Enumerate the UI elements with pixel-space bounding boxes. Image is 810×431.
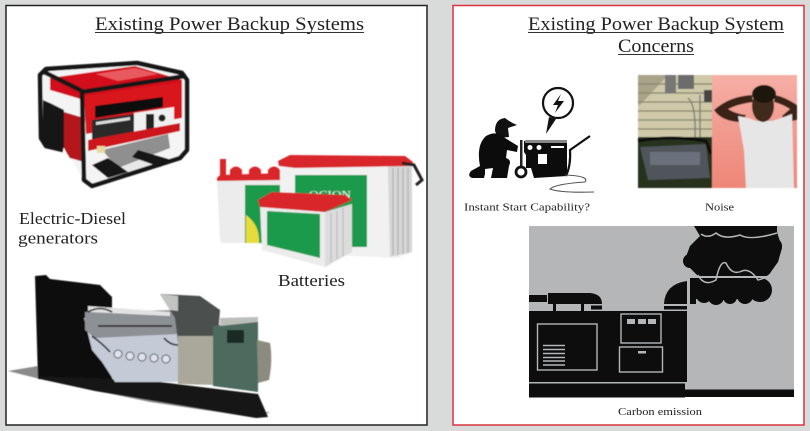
generator body: [529, 311, 794, 398]
label: electric-diesel generators: generators: [18, 228, 98, 248]
exhaust stack: [664, 278, 696, 310]
panel: existing power backup system concerns: [453, 6, 804, 425]
caption: carbon emission: Carbon emission: [618, 407, 703, 418]
battery: left: [217, 159, 285, 243]
muffler pipe: [529, 293, 602, 311]
icon: batteries: [217, 155, 422, 267]
battery: large rear: [278, 155, 422, 258]
smoke clouds: [683, 226, 782, 305]
label: electric-diesel generators: [18, 209, 126, 248]
icon: portable red generator: [40, 63, 187, 186]
heading: concerns: Existing Power Backup System: [528, 14, 784, 35]
heading: concerns: Concerns: [618, 36, 694, 57]
person covering ears: [714, 85, 797, 188]
panel: existing power backup systems: [6, 6, 427, 425]
label: electric-diesel generators: Electric-Diesel: [19, 209, 126, 228]
heading: existing systems: Existing Power Backup Systems: [95, 14, 364, 35]
battery: front: [258, 192, 352, 267]
battery: large rear: OCION: [309, 189, 351, 201]
photo: generator noise: [638, 75, 797, 188]
caption: noise: Noise: [705, 202, 734, 214]
photo: carbon emission generator illustration: [529, 226, 794, 398]
caption: instant start capability: Instant Start Capability?: [464, 202, 590, 214]
icon: worker starting generator: [469, 88, 594, 192]
icon: large diesel generator set: [8, 275, 271, 418]
heading: concerns: [528, 14, 784, 57]
label: batteries: Batteries: [278, 271, 345, 290]
